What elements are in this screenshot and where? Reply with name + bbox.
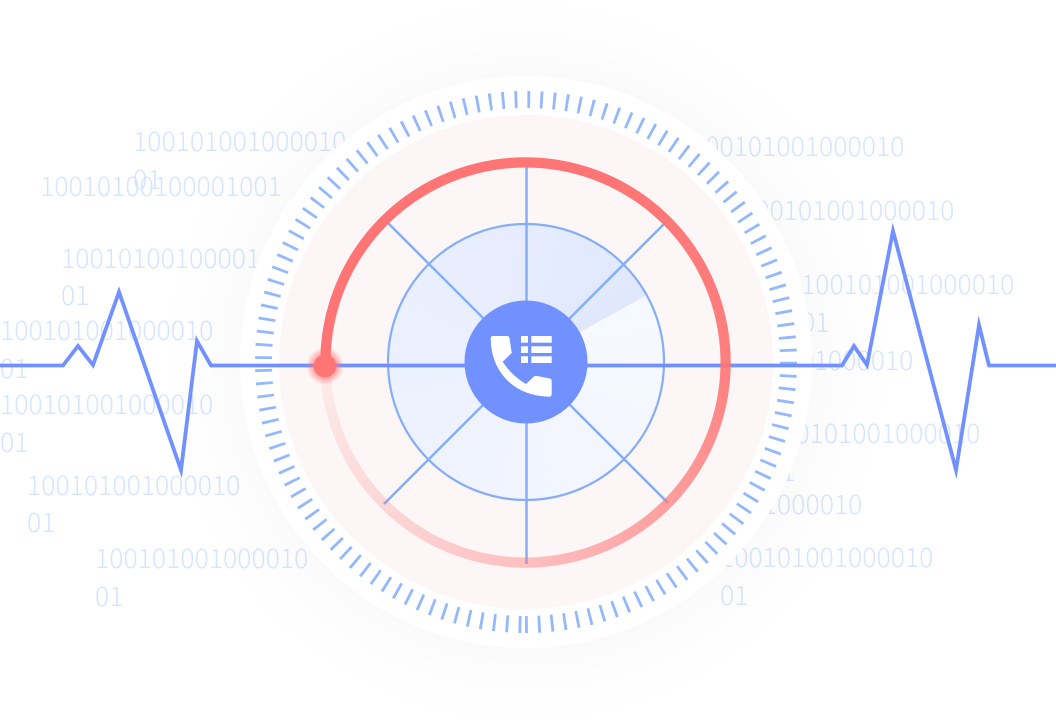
binary text background: 01 [95,575,123,614]
binary text background: 100101001000010 [61,237,274,276]
red arc start dot with glow [306,346,344,384]
binary text background: 100101001000010 [691,125,904,164]
binary text background: 01 [27,501,55,540]
binary text background: 100101001000010 [649,483,862,522]
binary text background: 100101001000010 [741,189,954,228]
background glow [156,0,896,726]
binary text background: 100101001000010 [801,263,1014,302]
binary text background: 10010100100001001 [40,165,282,204]
binary text background: 01 [0,421,28,460]
binary text background: 01 [720,574,748,613]
binary text background: 01 [801,301,829,340]
binary text background: 100101001000010 [767,412,980,451]
binary text background: 100101001000010 [720,536,933,575]
binary text background: 100101001000010 [0,383,213,422]
radar inner circle [388,224,664,500]
binary text background: 01 [61,274,89,313]
binary text background: 100101001000010 [133,120,346,159]
binary text background: 100101001000010 [95,537,308,576]
binary text background: 100101001000010 [0,309,213,348]
binary text background: 01 [133,158,161,197]
binary text background: 01 [0,347,28,386]
binary text background: 100101001000010 [27,464,240,503]
binary text background: 01 [767,450,795,489]
binary text background: 100101001000010 [700,339,913,378]
red progress arc [320,156,731,568]
